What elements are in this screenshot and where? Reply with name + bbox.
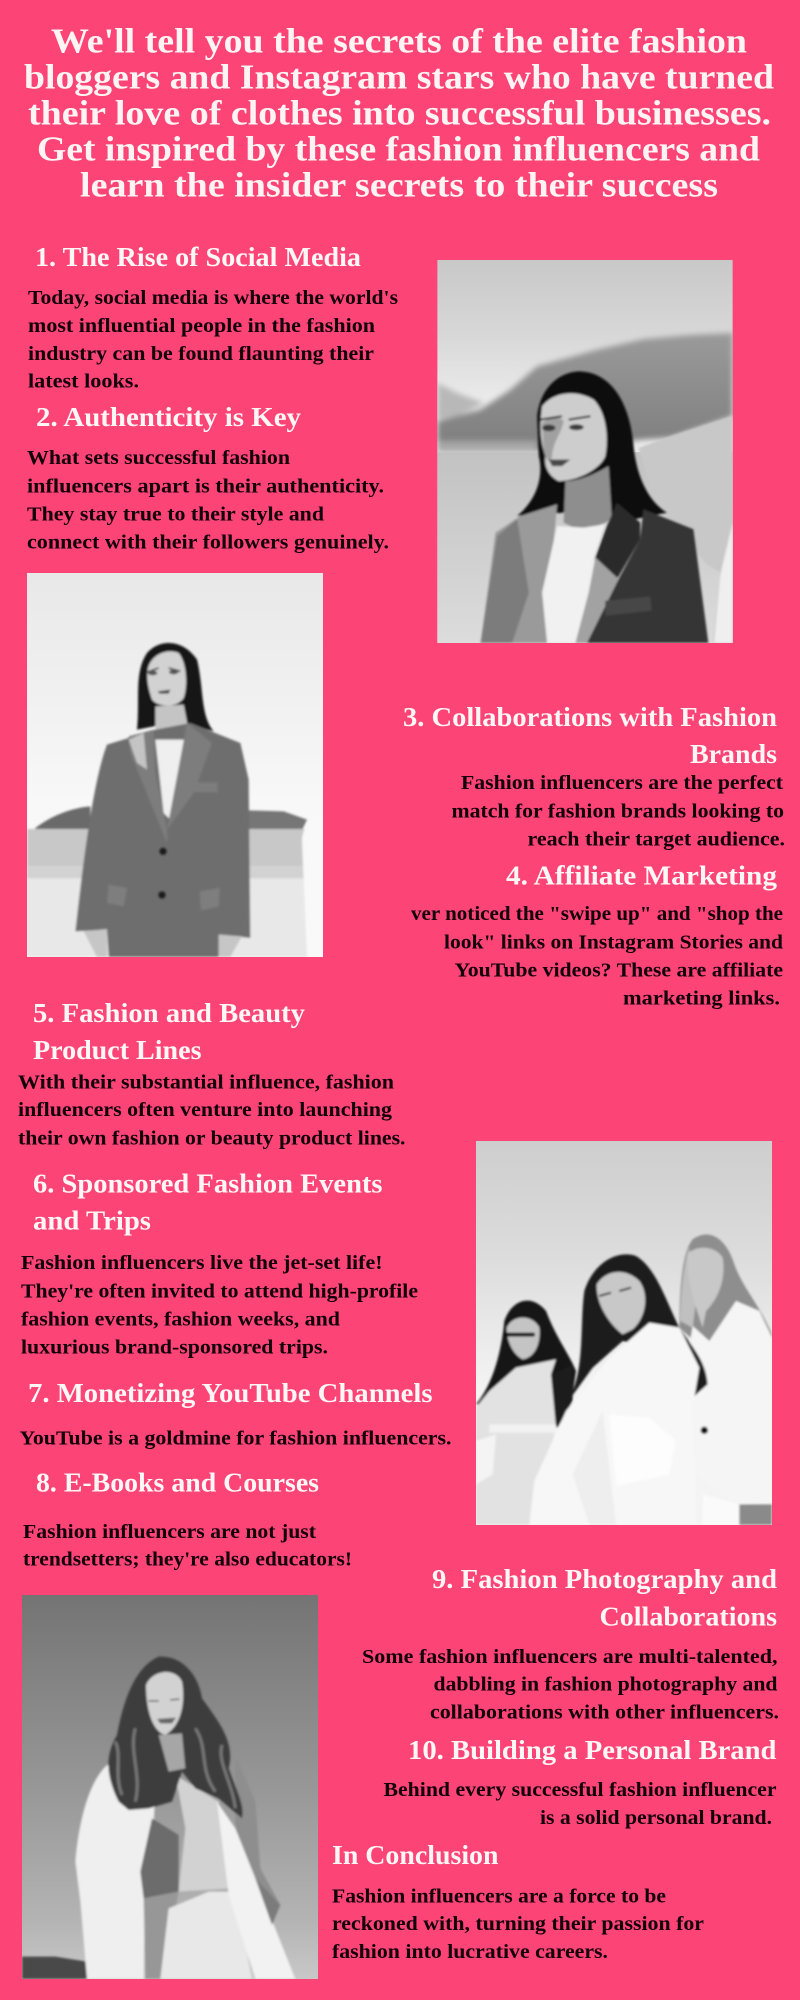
section 1: The Rise of Social Media xyxy=(28,242,398,392)
heading 3 xyxy=(403,702,777,769)
section 4: Affiliate Marketing xyxy=(411,860,784,1010)
heading 9: Collaborations xyxy=(600,1602,777,1632)
body text 6: Fashion influencers live the jet-set life! xyxy=(21,1252,382,1274)
section: In Conclusion xyxy=(332,1840,704,1963)
heading 9 xyxy=(432,1564,777,1632)
section 8: E-Books and Courses xyxy=(23,1468,352,1570)
heading 3: Brands xyxy=(690,739,777,769)
conclusion body text: fashion into lucrative careers. xyxy=(332,1941,608,1963)
section 6: Sponsored Fashion Events and Trips xyxy=(21,1168,418,1358)
body text 7: YouTube is a goldmine for fashion influencers. xyxy=(20,1428,452,1450)
section 10: Building a Personal Brand xyxy=(384,1735,776,1829)
body text 2: What sets successful fashion xyxy=(27,447,291,469)
body text 4: look" links on Instagram Stories and xyxy=(444,932,784,954)
section 5: Fashion and Beauty Product Lines xyxy=(18,998,406,1150)
heading 6: 6. Sponsored Fashion Events xyxy=(33,1168,382,1198)
title: Get inspired by these fashion influencers and xyxy=(37,130,761,168)
body text 10: is a solid personal brand. xyxy=(540,1807,772,1829)
heading 6 xyxy=(33,1168,382,1236)
body text 1: Today, social media is where the world's xyxy=(28,287,398,309)
photo: woman with dark hair and blazer by a lake xyxy=(437,260,733,643)
body text 8 xyxy=(23,1521,352,1570)
body text 9 xyxy=(362,1646,779,1724)
section 9: Fashion Photography and Collaborations xyxy=(362,1564,779,1724)
photo: woman in long grey blazer on a beach xyxy=(27,573,323,957)
body text 9: collaborations with other influencers. xyxy=(430,1702,779,1724)
body text 6: They're often invited to attend high-profile xyxy=(21,1280,418,1302)
body text 6: luxurious brand-sponsored trips. xyxy=(21,1336,328,1358)
heading 10: 10. Building a Personal Brand xyxy=(408,1735,776,1765)
heading 5: Product Lines xyxy=(33,1035,202,1065)
section 7: Monetizing YouTube Channels xyxy=(20,1378,452,1450)
body text 2: connect with their followers genuinely. xyxy=(27,532,389,554)
heading 9: 9. Fashion Photography and xyxy=(432,1564,777,1594)
body text 2: They stay true to their style and xyxy=(27,504,325,526)
heading 1: 1. The Rise of Social Media xyxy=(35,242,362,272)
body text 5: With their substantial influence, fashion xyxy=(18,1072,395,1094)
body text 2 xyxy=(27,447,389,554)
body text 8: Fashion influencers are not just xyxy=(23,1521,316,1543)
title xyxy=(24,22,775,204)
body text 3: match for fashion brands looking to xyxy=(452,800,784,822)
body text 4 xyxy=(411,903,784,1010)
photo: three women in white coats against the sky xyxy=(476,1141,772,1525)
title: their love of clothes into successful businesses. xyxy=(28,94,771,132)
body text 5: their own fashion or beauty product lines. xyxy=(18,1128,406,1150)
body text 9: Some fashion influencers are multi-talented, xyxy=(362,1646,778,1668)
section 2: Authenticity is Key xyxy=(27,402,389,554)
body text 2: influencers apart is their authenticity. xyxy=(27,476,384,498)
conclusion heading: In Conclusion xyxy=(332,1840,498,1870)
body text 1: most influential people in the fashion xyxy=(28,315,376,337)
body text 5 xyxy=(18,1072,406,1150)
heading 5 xyxy=(33,998,306,1065)
heading 2: 2. Authenticity is Key xyxy=(36,402,302,432)
section 3: Collaborations with Fashion Brands xyxy=(403,702,785,850)
body text 6 xyxy=(21,1252,418,1358)
body text 10: Behind every successful fashion influencer xyxy=(384,1779,776,1801)
body text 8: trendsetters; they're also educators! xyxy=(23,1548,352,1570)
heading 3: 3. Collaborations with Fashion xyxy=(403,702,777,732)
body text 10 xyxy=(384,1779,776,1829)
heading 7: 7. Monetizing YouTube Channels xyxy=(28,1378,432,1408)
conclusion body text: Fashion influencers are a force to be xyxy=(332,1886,666,1908)
body text 1 xyxy=(28,287,398,392)
title: We'll tell you the secrets of the elite fashion xyxy=(51,22,747,60)
body text 1: industry can be found flaunting their xyxy=(28,343,374,365)
conclusion body text xyxy=(332,1886,704,1963)
heading 4: 4. Affiliate Marketing xyxy=(506,860,778,890)
body text 6: fashion events, fashion weeks, and xyxy=(21,1308,341,1330)
heading 8: 8. E-Books and Courses xyxy=(36,1468,319,1498)
body text 4: YouTube videos? These are affiliate xyxy=(454,960,783,982)
body text 3 xyxy=(452,772,785,850)
heading 6: and Trips xyxy=(33,1206,151,1236)
title: learn the insider secrets to their success xyxy=(80,166,718,204)
body text 1: latest looks. xyxy=(28,370,139,392)
body text 3: Fashion influencers are the perfect xyxy=(461,772,783,794)
conclusion body text: reckoned with, turning their passion for xyxy=(332,1913,704,1935)
photo: woman with long curly hair in a white coat xyxy=(22,1595,318,1979)
body text 4: ver noticed the "swipe up" and "shop the xyxy=(411,903,783,925)
body text 4: marketing links. xyxy=(623,988,780,1010)
heading 5: 5. Fashion and Beauty xyxy=(33,998,306,1028)
body text 9: dabbling in fashion photography and xyxy=(434,1674,778,1696)
body text 3: reach their target audience. xyxy=(528,828,785,850)
title: bloggers and Instagram stars who have turned xyxy=(24,58,775,96)
body text 5: influencers often venture into launching xyxy=(18,1099,393,1121)
